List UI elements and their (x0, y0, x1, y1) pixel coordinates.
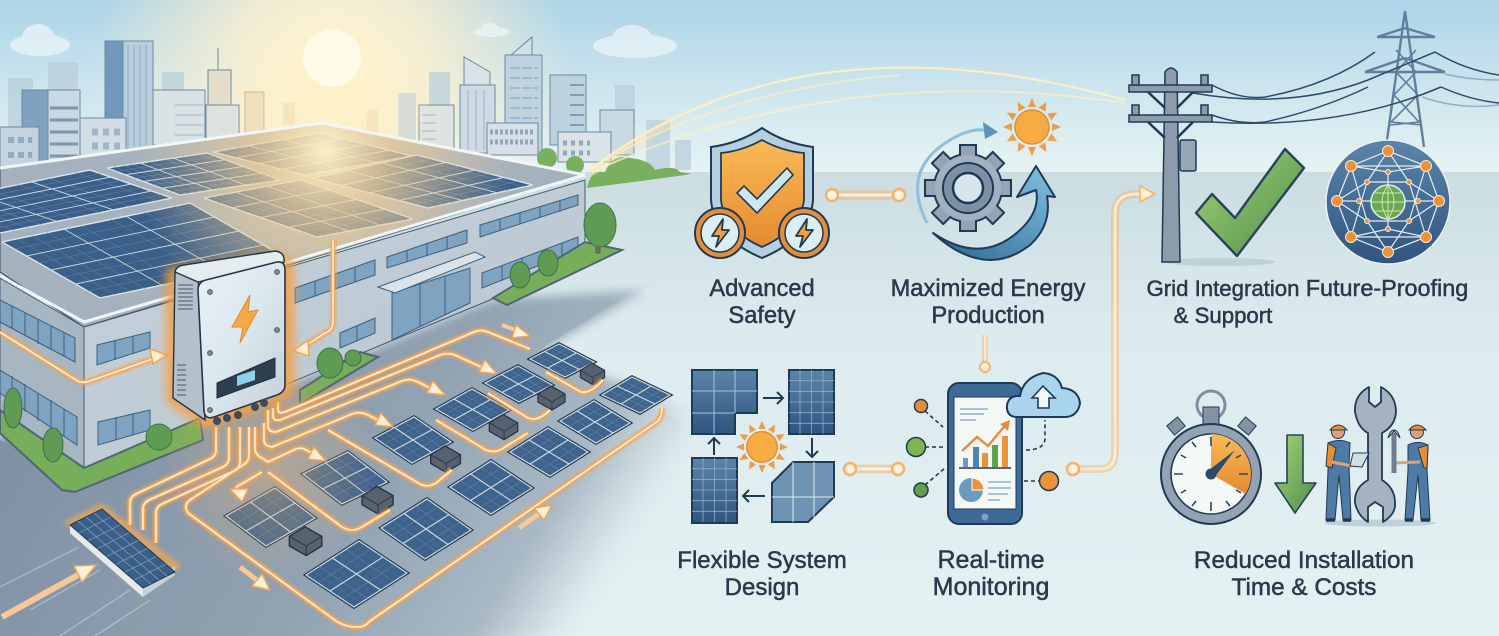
icon: downward green arrow (1275, 435, 1316, 513)
ground solar panels (226, 344, 670, 607)
connector: energy to monitoring (980, 335, 990, 372)
warm tint on nearest panels (160, 360, 380, 580)
sky background (0, 0, 1499, 172)
phone body (948, 383, 1022, 524)
entrance canopy (378, 252, 485, 293)
vents (177, 285, 193, 395)
control display (217, 358, 275, 398)
right wall (84, 180, 585, 468)
arcs to the grid (590, 68, 1125, 172)
heading: Reduced Installation Time & Costs: Reduced Installation (1194, 547, 1414, 574)
heading: Reduced Installation Time & Costs: Time & Costs (1232, 574, 1376, 601)
inverter top (175, 251, 284, 282)
heading: Maximized Energy Production: Maximized Energy (891, 276, 1086, 302)
trees and bushes (4, 203, 616, 462)
orange time sector (1211, 434, 1251, 494)
inverter glow (166, 252, 294, 430)
energy flow lines (0, 240, 662, 627)
parapet (0, 123, 585, 322)
panel lower left (692, 458, 737, 523)
pie chart (959, 478, 984, 502)
small sun (1003, 98, 1061, 156)
screws (208, 270, 280, 412)
warm sunlight over roof (144, 124, 505, 266)
roof (0, 123, 585, 327)
tick marks (1174, 437, 1248, 511)
large wrench (1355, 387, 1396, 522)
lightning badges (695, 208, 829, 258)
needle (1206, 450, 1235, 480)
rotation arrows (708, 392, 818, 502)
clouds (10, 23, 677, 58)
cloud upload (1007, 373, 1080, 417)
heading: Grid Integration & Support: Grid Integration (1147, 276, 1299, 301)
road and building shadow (0, 290, 690, 636)
panel right (789, 370, 834, 434)
heading: Future-Proofing: Future-Proofing (1306, 275, 1468, 301)
micro inverters (289, 363, 605, 556)
icon: gear with sun and arrows (918, 98, 1061, 260)
thin arrow (918, 130, 985, 223)
heading: Flexible System Design: Flexible System (677, 547, 847, 574)
panel L shape (692, 370, 757, 434)
heading: Flexible System Design: Design (725, 574, 799, 601)
connector: monitoring to grid (1067, 186, 1155, 475)
heading: Advanced Safety: Safety (728, 303, 796, 329)
thick arrow (933, 166, 1055, 260)
heading: Real-time Monitoring: Real-time (938, 546, 1044, 574)
connector: safety to energy (826, 189, 905, 201)
windows (0, 195, 578, 445)
solar array: roof panels (0, 133, 533, 298)
inverter (166, 251, 294, 430)
sunlight over skyline (222, 0, 442, 170)
sun glow (0, 0, 640, 200)
icon: stopwatch (1161, 391, 1261, 524)
flow arrows (2, 325, 552, 617)
bar chart (959, 420, 1011, 468)
ground background (0, 172, 1499, 636)
sun (303, 29, 361, 87)
icon: flexible system design (692, 370, 834, 523)
background shrubs (537, 148, 692, 188)
center globe (1371, 185, 1405, 219)
sensor nodes (906, 400, 1058, 497)
inverter front (198, 262, 285, 418)
heading: Advanced Safety: Advanced (709, 276, 815, 302)
bolt on inverter (232, 295, 258, 343)
landscaping beds (0, 242, 622, 492)
icon: workers with wrench (1324, 387, 1436, 526)
icon: utility pole (1129, 68, 1275, 266)
right worker (1388, 425, 1430, 520)
connector: design to monitoring (844, 463, 904, 475)
building (0, 110, 585, 468)
icon: transmission tower (1365, 11, 1445, 147)
heading: Maximized Energy Production: Production (931, 303, 1045, 329)
power lines (1193, 52, 1499, 123)
small sun (736, 421, 788, 473)
transformer (1180, 140, 1196, 171)
report lines (960, 409, 1011, 500)
gear (925, 145, 1011, 231)
icon: green check mark (1196, 149, 1304, 256)
left worker (1326, 425, 1369, 520)
left wall (0, 278, 84, 468)
home button (982, 514, 988, 520)
heading: Grid Integration & Support: & Support (1174, 303, 1272, 328)
city skyline (0, 37, 691, 170)
panel corner cut (772, 462, 834, 522)
check mark (737, 168, 793, 213)
heading: Real-time Monitoring: Monitoring (933, 573, 1049, 601)
icon: advanced safety shield (695, 128, 829, 258)
long solar panel (64, 503, 182, 597)
phone screen (954, 397, 1016, 509)
cable glands (213, 399, 268, 425)
icon: future-proof network globe (1326, 140, 1450, 264)
icon: phone monitoring (906, 373, 1080, 524)
motion streaks (0, 547, 150, 636)
inverter side (173, 272, 205, 420)
screen (237, 370, 255, 386)
